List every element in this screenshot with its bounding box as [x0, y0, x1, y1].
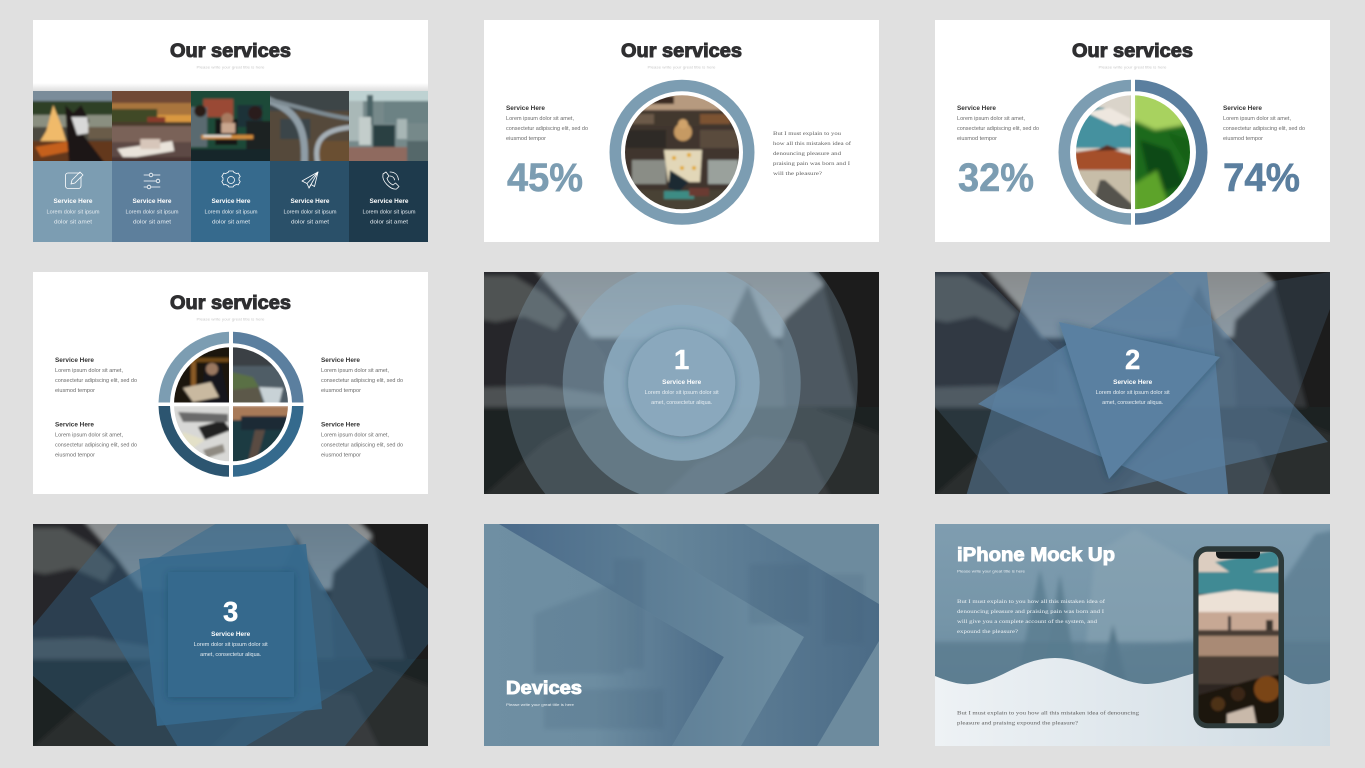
number: 3 — [223, 596, 238, 627]
square front — [168, 572, 294, 697]
icon: edit — [66, 172, 83, 188]
photo: campfire and dog — [33, 91, 112, 161]
square second — [139, 544, 322, 726]
heading: Our services — [170, 40, 291, 62]
text block: service: Lorem ipsum dolor sit amet, — [506, 116, 574, 122]
subtitle: Please write your great title is here — [648, 66, 716, 70]
percentage right: 74% — [1223, 156, 1300, 200]
background: forest mountains — [925, 529, 1340, 692]
label: Service Here — [212, 198, 251, 205]
description: Lorem dolor sit ipsum — [204, 210, 258, 216]
icon: gear — [222, 171, 240, 187]
description — [1096, 390, 1170, 406]
phone mockup — [1193, 546, 1284, 728]
description — [194, 642, 268, 658]
slide 7: layered squares — [33, 524, 428, 746]
text block: right service: Lorem ipsum dolor sit amet, — [1223, 116, 1291, 122]
panel: service 4 — [270, 161, 350, 242]
text block: bottom right — [321, 422, 403, 458]
text block: top left: Service Here — [55, 357, 94, 364]
wave — [935, 658, 1330, 746]
description — [204, 210, 258, 226]
ring — [615, 86, 749, 219]
text block: top right — [321, 357, 403, 394]
photo: boat on sunset lake — [112, 91, 191, 161]
icon: paper plane — [302, 172, 318, 188]
circle outer — [506, 207, 858, 559]
subtitle: Please write your great title is here — [196, 318, 264, 322]
slide 3: 32% and 74% split ring — [935, 20, 1330, 242]
photo: record store — [625, 95, 739, 210]
description: Lorem dolor sit ipsum dolor sit — [194, 642, 268, 648]
text block: left service: Lorem ipsum dolor sit amet, — [957, 116, 1025, 122]
background: mountain lake — [925, 262, 1340, 504]
slide 2: 45% with single ring photo — [484, 20, 879, 242]
description: dolor sit amet — [133, 220, 172, 226]
region left of first chevron — [484, 524, 724, 746]
photo: city at dusk — [233, 406, 288, 462]
building texture — [534, 559, 864, 729]
percentage: 45% — [507, 156, 583, 200]
photos: four quadrants — [174, 347, 288, 462]
photo right: green foliage — [1133, 90, 1195, 214]
subtitle: Please write your great title is here — [1098, 66, 1166, 70]
description — [46, 210, 100, 226]
slide 8: devices section — [484, 524, 879, 746]
subtitle: Please write your great title is here — [957, 570, 1025, 574]
text block: left service: consectetur adipiscing elit, sed do — [957, 126, 1039, 132]
description: dolor sit amet — [212, 220, 251, 226]
text block: service: consectetur adipiscing elit, sed do — [506, 126, 588, 132]
description — [362, 210, 416, 226]
description — [284, 210, 336, 226]
text block: top right: Service Here — [321, 357, 360, 364]
text block: right service: eiusmod tempor — [1223, 136, 1263, 142]
text block: bottom right: eiusmod tempor — [321, 452, 361, 458]
description: dolor sit amet — [54, 220, 93, 226]
text block: top right: eiusmod tempor — [321, 388, 361, 394]
label: Service Here — [54, 198, 93, 205]
paragraph lower: pleasure and praising expound the pleasure? — [957, 720, 1079, 726]
ring right half — [1135, 80, 1208, 225]
text block: left service: eiusmod tempor — [957, 136, 997, 142]
text block: top left — [55, 357, 137, 394]
heading: Our services — [621, 40, 742, 62]
panel: service 2 — [112, 161, 192, 242]
ring left half — [1058, 80, 1131, 225]
subtitle: Please write your great title is here — [196, 66, 264, 70]
text block: bottom left: consectetur adipiscing elit, sed do — [55, 442, 137, 448]
triangle middle — [978, 272, 1228, 494]
chevron band dark — [616, 524, 879, 746]
slide 5: concentric circles — [484, 272, 879, 494]
text block: right service — [1223, 105, 1305, 142]
circle second — [563, 264, 801, 502]
paragraph: will the pleasure? — [773, 171, 823, 177]
chevron band light — [499, 524, 804, 746]
label: Service Here — [662, 379, 702, 386]
phone body — [1193, 546, 1284, 728]
panel: service 1 — [33, 161, 112, 242]
paragraph lower — [957, 710, 1139, 726]
text block: left service: Service Here — [957, 105, 996, 112]
panel: service 5 — [349, 161, 428, 242]
text block: top left: eiusmod tempor — [55, 388, 95, 394]
description: Lorem dolor sit ipsum — [362, 210, 416, 216]
background: mountain lake — [474, 262, 889, 504]
photo: highway interchange — [270, 91, 349, 161]
text block: bottom left: eiusmod tempor — [55, 452, 95, 458]
text block: service: Service Here — [506, 105, 545, 112]
text block: left service — [957, 105, 1039, 142]
photo: coastline — [233, 347, 288, 402]
heading: Our services — [1072, 40, 1193, 62]
description: dolor sit amet — [291, 220, 330, 226]
text block: bottom left — [55, 422, 137, 458]
text block: service — [506, 105, 588, 142]
description: Lorem dolor sit ipsum dolor sit — [1096, 390, 1170, 396]
circle centre — [628, 329, 735, 436]
percentage left: 32% — [958, 156, 1034, 200]
photo: desk with notebook — [174, 406, 229, 462]
triangle front — [1059, 322, 1220, 479]
label: Service Here — [290, 198, 330, 205]
heading: Our services — [170, 292, 291, 314]
paragraph lower: But I must explain to you how all this mistaken idea of denouncing — [957, 710, 1139, 716]
paragraph: denouncing pleasure and — [773, 151, 841, 157]
label: Service Here — [132, 198, 172, 205]
description — [126, 210, 178, 226]
background: mountain lake — [23, 514, 438, 756]
paragraph upper: expound the pleasure? — [957, 629, 1019, 635]
label: Service Here — [370, 198, 409, 205]
paragraph — [773, 131, 851, 177]
circle third — [604, 305, 760, 461]
photo: city skyline — [349, 91, 428, 161]
description: Lorem dolor sit ipsum dolor sit — [645, 390, 719, 396]
notch — [1216, 552, 1260, 559]
text block: bottom right: consectetur adipiscing elit, sed do — [321, 442, 403, 448]
text block: bottom left: Service Here — [55, 422, 94, 428]
description: Lorem dolor sit ipsum — [284, 210, 336, 216]
text block: right service: Service Here — [1223, 105, 1262, 112]
description — [645, 390, 719, 406]
tint polygon — [935, 272, 1330, 494]
text block: top right: consectetur adipiscing elit, sed do — [321, 378, 403, 384]
photo left: desert road — [1076, 95, 1131, 210]
number: 2 — [1125, 344, 1140, 375]
photo: people at cafe table — [191, 91, 270, 161]
icon: phone call — [383, 172, 399, 189]
slide 1: services with five photos — [33, 20, 428, 242]
text block: bottom right: Service Here — [321, 422, 360, 428]
slide 4: four quadrant ring — [33, 272, 428, 494]
paragraph: praising pain was born and I — [773, 161, 850, 167]
text block: service: eiusmod tempor — [506, 136, 546, 142]
panel: service 3 — [191, 161, 270, 242]
paragraph upper — [957, 598, 1105, 635]
text block: top left: consectetur adipiscing elit, sed do — [55, 378, 137, 384]
square largest — [33, 524, 428, 746]
paragraph: how all this mistaken idea of — [773, 140, 851, 147]
description: amet, consectetur aliqua. — [1102, 400, 1163, 406]
photo: desert road and foliage — [1076, 95, 1190, 210]
description: amet, consectetur aliqua. — [651, 400, 712, 406]
text block: right service: consectetur adipiscing elit, sed do — [1223, 126, 1305, 132]
description: Lorem dolor sit ipsum — [126, 210, 178, 216]
description: Lorem dolor sit ipsum — [46, 210, 100, 216]
text block: top right: Lorem ipsum dolor sit amet, — [321, 368, 389, 374]
paragraph: But I must explain to you — [773, 131, 841, 137]
ring quadrants — [158, 332, 304, 477]
slide 9: iPhone mock up — [935, 524, 1330, 746]
heading: iPhone Mock Up — [957, 545, 1115, 566]
text block: bottom right: Lorem ipsum dolor sit amet, — [321, 432, 389, 438]
description: dolor sit amet — [370, 220, 409, 226]
text block: top left: Lorem ipsum dolor sit amet, — [55, 368, 123, 374]
paragraph upper: denouncing pleasure and praising pain was born and I — [957, 609, 1104, 615]
icon: sliders — [144, 173, 160, 189]
square third — [90, 524, 373, 746]
number: 1 — [674, 344, 689, 375]
heading: Devices — [506, 678, 582, 698]
paragraph upper: will give you a complete account of the system, and — [957, 618, 1097, 625]
paragraph upper: But I must explain to you how all this mistaken idea of — [957, 598, 1105, 605]
phone screen — [1198, 552, 1278, 724]
label: Service Here — [211, 631, 251, 638]
slide 6: layered triangles — [935, 272, 1330, 494]
text block: bottom left: Lorem ipsum dolor sit amet, — [55, 432, 123, 438]
label: Service Here — [1113, 379, 1153, 386]
triangle large — [967, 272, 1328, 494]
description: amet, consectetur aliqua. — [200, 652, 261, 658]
photo: man reading newspaper — [174, 347, 229, 402]
subtitle: Please write your great title is here — [506, 703, 574, 707]
